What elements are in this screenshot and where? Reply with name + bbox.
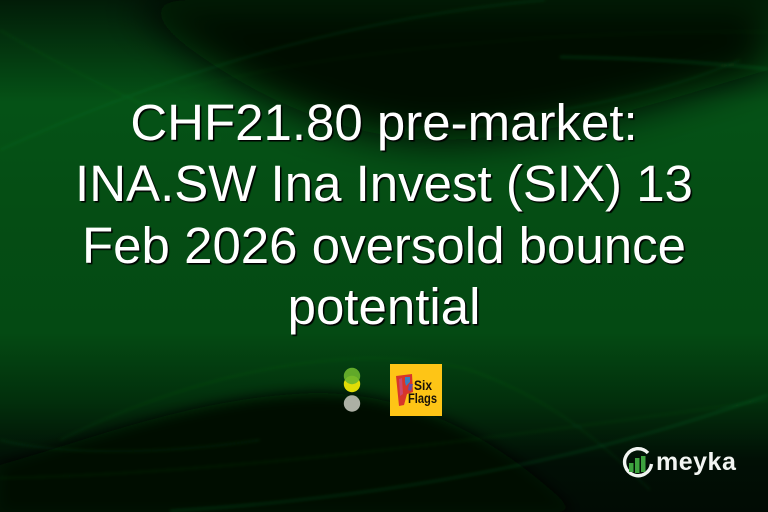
- wordmark: meyka: [656, 448, 736, 476]
- icon: Six Flags logo: Six: [414, 377, 432, 393]
- title: potential: [288, 278, 480, 335]
- icon: meyka ring with bars: [622, 447, 654, 478]
- title: [75, 94, 693, 336]
- title: CHF21.80 pre-market:: [130, 94, 638, 151]
- title: Feb 2026 oversold bounce: [82, 217, 686, 274]
- icon: three stacked dots: [344, 368, 360, 412]
- icon: Six Flags logo: [390, 364, 442, 416]
- title: INA.SW Ina Invest (SIX) 13: [75, 155, 693, 212]
- logo: meyka: [622, 447, 736, 478]
